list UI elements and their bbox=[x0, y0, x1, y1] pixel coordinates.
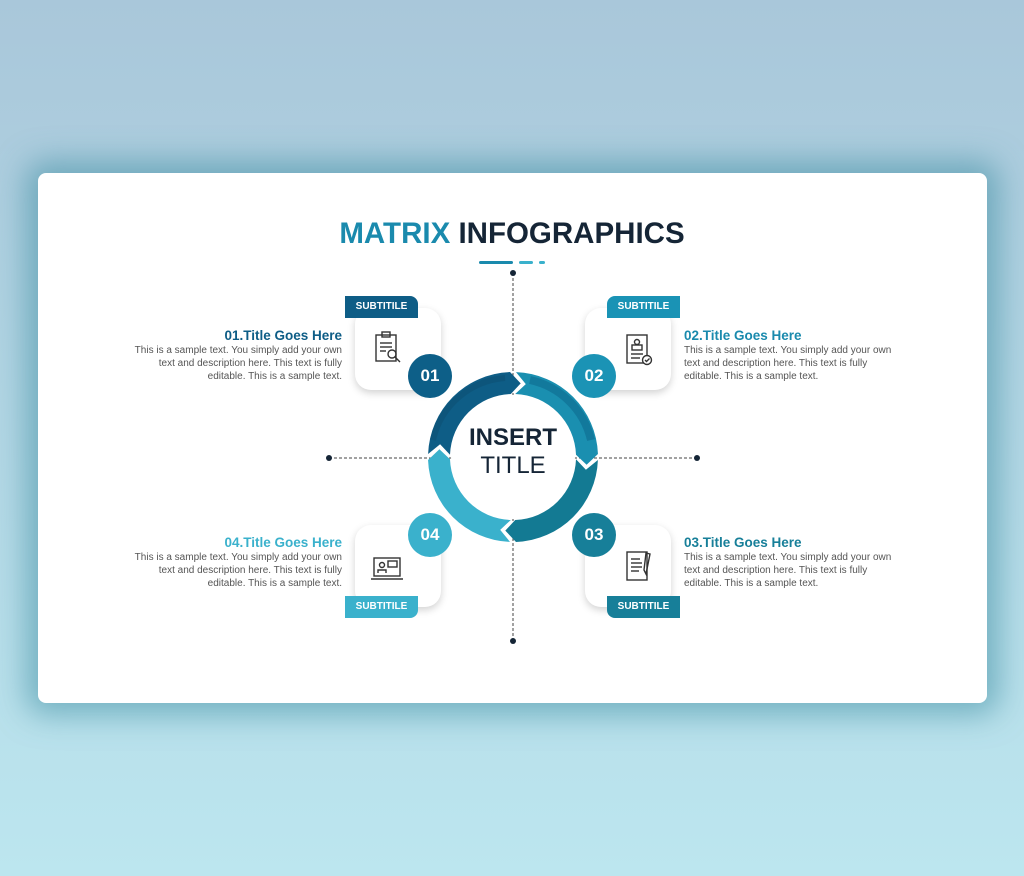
center title: INSERT bbox=[469, 424, 557, 451]
panel: item 02 bbox=[572, 296, 891, 398]
title: MATRIX INFOGRAPHICS bbox=[339, 217, 685, 250]
number 02: 02 bbox=[585, 366, 603, 385]
box 01 bbox=[355, 308, 441, 390]
title underline bbox=[479, 261, 545, 264]
text 04: 04.Title Goes Here bbox=[224, 535, 342, 550]
panel: item 01 bbox=[134, 296, 452, 398]
box 04 bbox=[355, 525, 441, 607]
number 04 bbox=[408, 513, 452, 557]
panel: card bbox=[38, 173, 987, 703]
text 01: 01.Title Goes Here bbox=[224, 328, 342, 343]
text 02: 02.Title Goes Here bbox=[684, 328, 802, 343]
text 01 bbox=[134, 328, 342, 382]
tab 03 bbox=[607, 596, 680, 618]
icon: clipboard bbox=[375, 331, 400, 362]
text 04 bbox=[134, 535, 342, 589]
tab 03: SUBTITILE bbox=[618, 601, 669, 612]
tab 04 bbox=[345, 596, 418, 618]
panel: item 04 bbox=[134, 513, 452, 618]
number 03: 03 bbox=[585, 525, 603, 544]
tab 01: SUBTITILE bbox=[356, 301, 407, 312]
box 02 bbox=[585, 308, 671, 390]
text 02: This is a sample text. You simply add your own text and description here. This text is fully editable. This is a sample text. bbox=[684, 345, 891, 382]
text 03: 03.Title Goes Here bbox=[684, 535, 802, 550]
box 03 bbox=[585, 525, 671, 607]
tab 02 bbox=[607, 296, 680, 318]
number 01: 01 bbox=[421, 366, 439, 385]
number 01 bbox=[408, 354, 452, 398]
tab 01 bbox=[345, 296, 418, 318]
text 04: This is a sample text. You simply add your own text and description here. This text is fully editable. This is a sample text. bbox=[135, 552, 342, 589]
icon: laptop chat bbox=[371, 557, 403, 580]
panel: item 03 bbox=[572, 513, 891, 618]
text 01: This is a sample text. You simply add your own text and description here. This text is fully editable. This is a sample text. bbox=[135, 345, 342, 382]
icon: document pen bbox=[626, 551, 651, 581]
tab 04: SUBTITILE bbox=[356, 601, 407, 612]
tab 02: SUBTITILE bbox=[618, 301, 669, 312]
number 03 bbox=[572, 513, 616, 557]
icon: certificate bbox=[626, 334, 652, 366]
number 04: 04 bbox=[421, 525, 439, 544]
text 03: This is a sample text. You simply add your own text and description here. This text is fully editable. This is a sample text. bbox=[684, 552, 891, 589]
center title: TITLE bbox=[480, 452, 546, 479]
center title bbox=[469, 424, 557, 479]
text 02 bbox=[684, 328, 891, 382]
number 02 bbox=[572, 354, 616, 398]
text 03 bbox=[684, 535, 891, 589]
